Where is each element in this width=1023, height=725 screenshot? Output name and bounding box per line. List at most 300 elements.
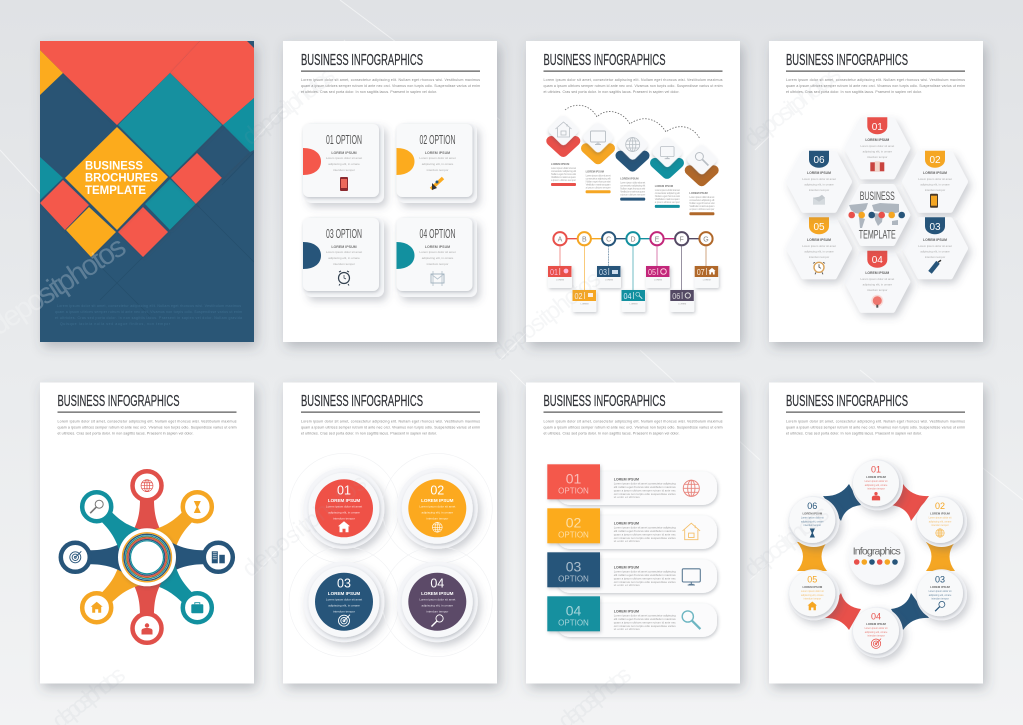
intro text: quam a ipsum ultrices semper rutrum id ante nec orci. Vivamus non turpis odio. Suspendisse varius ut enim (544, 426, 723, 430)
circle 01 (289, 453, 399, 563)
hexagon 06: Lorem ipsum dolor sit amet (802, 177, 836, 181)
row 01: ut enim et ultricies (614, 495, 640, 499)
intro text: Lorem ipsum dolor sit amet, consectetur adipiscing elit. Nullam eget rhoncus wisi. Vestibulum maximus (58, 420, 237, 424)
row 04: ut enim et ultricies (614, 627, 640, 631)
circle 03: Lorem ipsum dolor sit amet (326, 598, 362, 602)
card: 01 option: 01 OPTION (326, 133, 362, 147)
card: 02 option: adipiscing elit, in ornare (422, 162, 454, 166)
row 04: OPTION (558, 618, 589, 628)
watermarks: depositphotos (739, 500, 834, 583)
intro text: Lorem ipsum dolor sit amet, consectetur adipiscing elit. Nullam eget rhoncus wisi. Vestibulum maximus (786, 420, 965, 424)
intro text: quam a ipsum ultrices semper rutrum id ante nec orci. Vivamus non turpis odio. Suspendisse varius ut enim (301, 84, 480, 88)
card: 04 option (396, 218, 477, 297)
page background (769, 382, 983, 684)
timeline nodes A-G (553, 232, 713, 245)
hexagon 04: LOREM IPSUM (865, 271, 889, 275)
watermarks: depositphotos (739, 61, 846, 153)
step 1: LOREM IPSUM (551, 162, 569, 166)
circle 03 (289, 547, 399, 657)
tag 05: 05 (648, 268, 656, 277)
hexagon 06: interdum tempor (809, 188, 829, 192)
step 2: consectetur adipiscing elit (586, 176, 611, 180)
node 06: interdum tempor (804, 524, 821, 527)
node 01: Lorem ipsum dolor sit (865, 480, 888, 483)
node 06 (788, 496, 839, 547)
intro text: et ultricies. Cras sed porta dolor. In non sagittis lacus. Praesent in sapien vel dolor. (786, 432, 922, 436)
step 4: Vestibulum maximus quam (655, 197, 680, 201)
row 01: orci vivamus non turpis odio suspendisse varius (614, 492, 676, 496)
intro text: Lorem ipsum dolor sit amet, consectetur adipiscing elit. Nullam eget rhoncus wisi. Vestibulum maximus (544, 78, 723, 82)
step 5: Nullam eget rhoncus wisi (689, 201, 715, 205)
step 2: Vestibulum maximus quam (586, 182, 611, 186)
watermark lines (0, 0, 1023, 580)
card: 02 option: 02 OPTION (420, 133, 456, 147)
row 03: LOREM IPSUM (614, 566, 639, 570)
row 03: orci vivamus non turpis odio suspendisse varius (614, 580, 676, 584)
hexagon 03: Lorem ipsum dolor sit amet (918, 244, 952, 248)
row 04 (547, 596, 717, 637)
centre circle: Infographics (853, 545, 901, 557)
hexagon 05: interdum tempor (809, 255, 829, 259)
node 03 (916, 569, 967, 620)
page background (526, 382, 740, 684)
intro text (786, 420, 965, 436)
watermarks (0, 61, 846, 725)
hexagon 04: interdum tempor (867, 288, 888, 292)
tag 03 (597, 266, 621, 288)
cover small text: quam a ipsum ultrices semper rutrum id ante nec orci. Vivamus non turpis odio. Suspendisse varius ut enim (55, 310, 242, 314)
icon: phone (340, 177, 348, 191)
node 02: Lorem ipsum dolor sit (929, 516, 952, 520)
circle 01: LOREM IPSUM (328, 498, 360, 503)
colored dots (848, 212, 905, 218)
node 04: LOREM IPSUM (866, 622, 887, 626)
card: 04 option: 04 OPTION (420, 227, 456, 241)
hexagon 05: adipiscing elit, in ornare (804, 249, 834, 253)
row 01: Lorem ipsum dolor sit amet consectetur adipiscing (614, 482, 676, 486)
node 06: LOREM IPSUM (802, 512, 823, 516)
row 02: Lorem ipsum dolor sit amet consectetur adipiscing (614, 526, 676, 530)
circle 04 (382, 547, 492, 657)
step 5: Lorem ipsum dolor sit amet (689, 195, 715, 199)
circle 02: LOREM IPSUM (421, 498, 454, 503)
hexagon 05 (788, 217, 850, 277)
central ring (118, 528, 176, 586)
row 03: Lorem ipsum dolor sit amet consectetur adipiscing (614, 570, 676, 574)
hexagon 06: 06 (813, 155, 825, 166)
hexagon 04: adipiscing elit, in ornare (863, 283, 892, 287)
node 05: adipiscing elit, ornare (801, 594, 824, 597)
intro text: quam a ipsum ultrices semper rutrum id ante nec orci. Vivamus non turpis odio. Suspendisse varius ut enim (786, 84, 965, 88)
card: 01 option: LOREM IPSUM (331, 151, 357, 155)
circle 03: adipiscing elit, in ornare (328, 604, 360, 608)
timeline nodes A-G: G (703, 236, 709, 243)
row 04: 04 (566, 602, 581, 618)
intro text: et ultricies. Cras sed porta dolor. In non sagittis lacus. Praesent in sapien vel dolor. (301, 432, 437, 436)
icon: envelope (431, 271, 444, 286)
cover small text: Quisque lacinia nulla sed augue finibus, non tempor (60, 322, 171, 326)
step 1 (547, 114, 580, 186)
tag 01 (548, 266, 572, 288)
tag 07: LOREM (703, 280, 711, 282)
tag 03: LOREM (605, 280, 613, 282)
spoke connectors and nodes (61, 471, 233, 643)
hexagon 04: 04 (872, 255, 883, 266)
intro text (301, 420, 480, 436)
row 04: orci vivamus non turpis odio suspendisse varius (614, 624, 676, 628)
step 1: Vestibulum maximus quam (551, 175, 576, 179)
node 05: LOREM IPSUM (802, 585, 823, 589)
node 02: interdum tempor (931, 524, 949, 527)
panel: hexagon diagram (769, 41, 983, 342)
step 3: Nullam eget rhoncus wisi (620, 187, 646, 191)
timeline nodes A-G: B (582, 236, 587, 243)
intro text: et ultricies. Cras sed porta dolor. In non sagittis lacus. Praesent in sapien vel dolor. (544, 432, 680, 436)
tag 01: LOREM (556, 280, 564, 282)
step 4: Nullam eget rhoncus wisi (655, 194, 680, 198)
intro text (786, 78, 965, 94)
dotted path (565, 105, 700, 139)
page background (283, 41, 497, 342)
timeline nodes A-G: A (558, 236, 563, 243)
intro text: Lorem ipsum dolor sit amet, consectetur adipiscing elit. Nullam eget rhoncus wisi. Vestibulum maximus (544, 420, 723, 424)
row 04: quam a ipsum ultrices semper rutrum id ante nec (614, 620, 676, 624)
card: 02 option: interdum tempor (427, 168, 448, 172)
tag 07 (695, 266, 719, 288)
row 01: OPTION (558, 486, 589, 496)
heading: BUSINESS INFOGRAPHICS (301, 52, 423, 69)
node 04: interdum tempor (867, 635, 885, 638)
timeline nodes A-G: F (680, 236, 684, 243)
page background (40, 382, 254, 684)
page background (283, 382, 497, 684)
intro text: quam a ipsum ultrices semper rutrum id ante nec orci. Vivamus non turpis odio. Suspendisse varius ut enim (786, 426, 965, 430)
cover small text: et ultricies. Cras sed porta dolor. In non sagittis lacus. Praesent in sapien vel dolor. Nullam gravida (55, 316, 242, 320)
timeline nodes A-G: E (655, 236, 660, 243)
row 02: LOREM IPSUM (614, 522, 639, 526)
hexagon 01: Lorem ipsum dolor sit amet (860, 144, 894, 148)
hexagon 02: adipiscing elit, in ornare (920, 183, 950, 187)
node 03: LOREM IPSUM (930, 585, 951, 589)
hexagon 05: Lorem ipsum dolor sit amet (802, 244, 836, 248)
row 02: ut enim et ultricies (614, 539, 640, 543)
intro text: Lorem ipsum dolor sit amet, consectetur adipiscing elit. Nullam eget rhoncus wisi. Vestibulum maximus (301, 78, 480, 82)
centre hexagon: BUSINESS (860, 191, 895, 203)
step 3: Vestibulum maximus quam (620, 190, 645, 194)
card: 01 option: Lorem ipsum dolor sit amet (326, 156, 362, 160)
node 01: LOREM IPSUM (866, 475, 887, 479)
card: 04 option: LOREM IPSUM (425, 245, 450, 249)
intro text: et ultricies. Cras sed porta dolor. In non sagittis lacus. Praesent in sapien vel dolor. (58, 432, 194, 436)
heading: BUSINESS INFOGRAPHICS (544, 393, 666, 410)
tag 02: 02 (574, 292, 583, 301)
node 05 (788, 569, 839, 620)
row 03: elit nullam eget rhoncus wisi vestibulum maximus (614, 573, 676, 577)
icon: world map (849, 203, 899, 228)
panel: radial hub (40, 382, 254, 684)
timeline connectors (560, 239, 706, 290)
intro text (58, 420, 237, 436)
heading: BUSINESS INFOGRAPHICS (786, 52, 908, 69)
hexagon 02: interdum tempor (925, 188, 945, 192)
tag 07: 07 (697, 268, 705, 277)
intro text: et ultricies. Cras sed porta dolor. In non sagittis lacus. Praesent in sapien vel dolor. (301, 90, 437, 94)
tag 06 (670, 290, 694, 312)
hexagon 01: adipiscing elit, in ornare (863, 149, 892, 153)
step 5: a ipsum ultrices semper (689, 207, 715, 211)
step 5: Vestibulum maximus quam (689, 204, 714, 208)
row 03: 03 (566, 558, 581, 574)
intro text: et ultricies. Cras sed porta dolor. In non sagittis lacus. Praesent in sapien vel dolor. (544, 90, 680, 94)
centre circle (849, 529, 905, 585)
node icons (70, 480, 225, 634)
intro text: quam a ipsum ultrices semper rutrum id ante nec orci. Vivamus non turpis odio. Suspendisse varius ut enim (58, 426, 237, 430)
tag 06: LOREM (678, 304, 686, 306)
node 02: 02 (935, 501, 945, 511)
cover small text: Lorem ipsum dolor sit amet, consectetur adipiscing elit. Nullam eget rhoncus wisi. Vestibulum maximus (57, 304, 241, 308)
watermarks: depositphotos (487, 265, 606, 367)
step 4 (651, 136, 684, 208)
card: 02 option: Lorem ipsum dolor sit amet (419, 156, 456, 160)
node 01: adipiscing elit, ornare (865, 484, 888, 487)
intro text: Lorem ipsum dolor sit amet, consectetur adipiscing elit. Nullam eget rhoncus wisi. Vestibulum maximus (786, 78, 965, 82)
circle 02: adipiscing elit, in ornare (422, 510, 453, 514)
step 5: LOREM IPSUM (689, 191, 708, 195)
heading: BUSINESS INFOGRAPHICS (301, 393, 423, 410)
step 1: a ipsum ultrices semper (551, 178, 576, 182)
heading: BUSINESS INFOGRAPHICS (544, 52, 666, 69)
node 04: adipiscing elit, ornare (865, 631, 888, 634)
cover title (85, 159, 158, 197)
node 03: 03 (935, 574, 945, 584)
circle 04: 04 (430, 577, 444, 591)
intro text: quam a ipsum ultrices semper rutrum id ante nec orci. Vivamus non turpis odio. Suspendisse varius ut enim (544, 84, 723, 88)
step 1: Lorem ipsum dolor sit amet (551, 166, 576, 170)
row 02: elit nullam eget rhoncus wisi vestibulum maximus (614, 529, 676, 533)
row 02: 02 (566, 514, 581, 530)
tag 04: 04 (624, 292, 632, 301)
step 1: Nullam eget rhoncus wisi (551, 172, 576, 176)
hexagon 03: LOREM IPSUM (923, 238, 947, 242)
card: 03 option: Lorem ipsum dolor sit amet (326, 250, 362, 254)
node 06: 06 (807, 501, 817, 511)
card: 01 option: adipiscing elit, in ornare (328, 162, 360, 166)
circle 01: Lorem ipsum dolor sit amet (326, 504, 362, 508)
hexagon 02: Lorem ipsum dolor sit amet (918, 177, 952, 181)
card: 03 option: 03 OPTION (326, 227, 362, 241)
row 02: orci vivamus non turpis odio suspendisse varius (614, 536, 676, 540)
step 4: Lorem ipsum dolor sit amet (655, 188, 680, 192)
step 1: consectetur adipiscing elit (551, 169, 576, 173)
tag 04: LOREM (630, 304, 638, 306)
watermarks: depositphotos (237, 469, 372, 583)
hexagon 03: interdum tempor (925, 255, 945, 259)
curved connectors (797, 484, 955, 630)
circle 03: 03 (337, 577, 351, 591)
circle 04: interdum tempor (426, 610, 448, 614)
hexagon 02 (904, 151, 966, 210)
panel: four circles (283, 382, 497, 684)
heading: BUSINESS INFOGRAPHICS (58, 393, 180, 410)
hexagon 06: adipiscing elit, in ornare (804, 183, 834, 187)
icon: alarm clock (338, 271, 350, 286)
row 03: quam a ipsum ultrices semper rutrum id ante nec (614, 576, 676, 580)
row 01 (547, 464, 717, 505)
hexagon 06 (788, 151, 850, 210)
page background (526, 41, 740, 342)
cover small text (55, 304, 242, 326)
step 3: a ipsum ultrices semper (620, 193, 645, 197)
row 01: 01 (566, 470, 581, 486)
intro text (301, 78, 480, 94)
tag 03: 03 (599, 268, 607, 277)
cover title: BUSINESS (85, 159, 143, 172)
intro text: Lorem ipsum dolor sit amet, consectetur adipiscing elit. Nullam eget rhoncus wisi. Vestibulum maximus (301, 420, 480, 424)
step 3: consectetur adipiscing elit (620, 184, 645, 188)
circle 04: Lorem ipsum dolor sit amet (419, 598, 456, 602)
tag 05 (646, 266, 670, 288)
panel: brochure cover (40, 41, 254, 342)
hexagon 04 (847, 251, 908, 310)
row 02: OPTION (558, 530, 589, 540)
heading: BUSINESS INFOGRAPHICS (786, 393, 908, 410)
circle 02: Lorem ipsum dolor sit amet (419, 504, 456, 508)
circle 03: LOREM IPSUM (328, 591, 360, 596)
card: 03 option: LOREM IPSUM (331, 245, 357, 249)
timeline nodes A-G: C (606, 236, 611, 243)
circle 03: interdum tempor (333, 610, 355, 614)
row 01: quam a ipsum ultrices semper rutrum id ante nec (614, 488, 676, 492)
intro text (544, 78, 723, 94)
hexagon 02: 02 (929, 155, 941, 166)
circle 02 (382, 453, 492, 563)
panel: option list (526, 382, 740, 684)
card: 03 option: interdum tempor (333, 262, 355, 266)
watermarks: depositphotos (237, 62, 340, 151)
step 4: LOREM IPSUM (655, 184, 673, 188)
tag 05: LOREM (654, 280, 662, 282)
page background (769, 41, 983, 342)
tag 04 (622, 290, 646, 312)
step 3: LOREM IPSUM (620, 177, 639, 181)
node 02 (916, 496, 967, 547)
row 01: LOREM IPSUM (614, 478, 639, 482)
circle 02: interdum tempor (426, 516, 448, 520)
row 04: Lorem ipsum dolor sit amet consectetur adipiscing (614, 614, 676, 618)
cover title: TEMPLATE (85, 184, 146, 197)
node 03: adipiscing elit, ornare (929, 594, 952, 597)
panel: circular cycle (769, 382, 983, 684)
card: 04 option: interdum tempor (427, 262, 448, 266)
intro text (544, 420, 723, 436)
row 01: elit nullam eget rhoncus wisi vestibulum maximus (614, 485, 676, 489)
step 5: consectetur adipiscing elit (689, 198, 715, 202)
hexagon 01: 01 (872, 122, 883, 133)
card: 03 option (303, 218, 384, 297)
intro text: quam a ipsum ultrices semper rutrum id ante nec orci. Vivamus non turpis odio. Suspendisse varius ut enim (301, 426, 480, 430)
node 04: 04 (871, 612, 881, 622)
node 02: LOREM IPSUM (930, 512, 951, 516)
card: 02 option (396, 124, 477, 203)
row 04: LOREM IPSUM (614, 610, 639, 614)
page background (40, 41, 254, 342)
panel: options cards (283, 41, 497, 342)
circle 01: 01 (337, 483, 351, 497)
hexagon 05: LOREM IPSUM (807, 238, 831, 242)
hexagon 03: adipiscing elit, in ornare (920, 249, 950, 253)
hexagon 03: 03 (929, 222, 941, 233)
hexagon 06: LOREM IPSUM (807, 171, 831, 175)
step 2: a ipsum ultrices semper (586, 185, 611, 189)
tag 02 (572, 290, 596, 312)
centre hexagon: TEMPLATE (859, 230, 896, 242)
node 06: adipiscing elit, ornare (801, 520, 824, 524)
circle 02: 02 (430, 483, 444, 497)
step 2 (582, 122, 614, 193)
step 3: Lorem ipsum dolor sit amet (620, 181, 645, 185)
node 04 (852, 607, 903, 658)
circle 01: adipiscing elit, in ornare (328, 510, 360, 514)
hexagon 02: LOREM IPSUM (923, 171, 947, 175)
hexagon 04: Lorem ipsum dolor sit amet (860, 277, 894, 281)
node 03: Lorem ipsum dolor sit (929, 590, 952, 593)
intro text: et ultricies. Cras sed porta dolor. In non sagittis lacus. Praesent in sapien vel dolor. (786, 90, 922, 94)
card: 01 option (303, 124, 384, 203)
step 2: Lorem ipsum dolor sit amet (586, 173, 611, 177)
circle 01: interdum tempor (333, 516, 355, 520)
step 2: LOREM IPSUM (586, 169, 604, 173)
node 05: interdum tempor (804, 597, 821, 600)
hexagon 05: 05 (813, 222, 825, 233)
node 01: 01 (871, 464, 881, 474)
node 05: Lorem ipsum dolor sit (801, 590, 824, 593)
row 03: OPTION (558, 574, 589, 584)
tag 01: 01 (550, 268, 558, 277)
geometric diamonds (40, 41, 254, 316)
step 5 (686, 143, 718, 215)
panel: chevron steps and timeline (526, 41, 740, 342)
step 2: Nullam eget rhoncus wisi (586, 179, 611, 183)
icon: rocket (431, 178, 443, 190)
node 04: Lorem ipsum dolor sit (865, 627, 888, 630)
node 01: interdum tempor (867, 487, 885, 490)
card: 03 option: adipiscing elit, in ornare (328, 256, 360, 260)
card: 04 option: Lorem ipsum dolor sit amet (419, 250, 456, 254)
timeline nodes A-G: D (630, 236, 636, 243)
hexagon 01: LOREM IPSUM (865, 138, 889, 142)
row 03: ut enim et ultricies (614, 583, 640, 587)
cover title: BROCHURES (85, 172, 158, 185)
step 3 (616, 129, 649, 201)
row 04: elit nullam eget rhoncus wisi vestibulum maximus (614, 617, 676, 621)
node 05: 05 (807, 574, 817, 584)
row 03 (547, 552, 717, 593)
row 02 (547, 508, 717, 549)
centre hexagon (847, 186, 908, 244)
card: 02 option: LOREM IPSUM (425, 151, 450, 155)
card: 04 option: adipiscing elit, in ornare (422, 256, 454, 260)
node 03: interdum tempor (931, 597, 949, 600)
tag 02: LOREM (581, 304, 589, 306)
step 4: a ipsum ultrices semper (655, 200, 680, 204)
node 02: adipiscing elit, ornare (929, 520, 952, 524)
hexagon 01 (847, 117, 908, 177)
node 06: Lorem ipsum dolor sit (801, 516, 824, 520)
row 02: quam a ipsum ultrices semper rutrum id ante nec (614, 532, 676, 536)
circle 04: adipiscing elit, in ornare (422, 604, 453, 608)
hexagon 01: interdum tempor (867, 155, 888, 159)
circle 04: LOREM IPSUM (421, 591, 454, 596)
